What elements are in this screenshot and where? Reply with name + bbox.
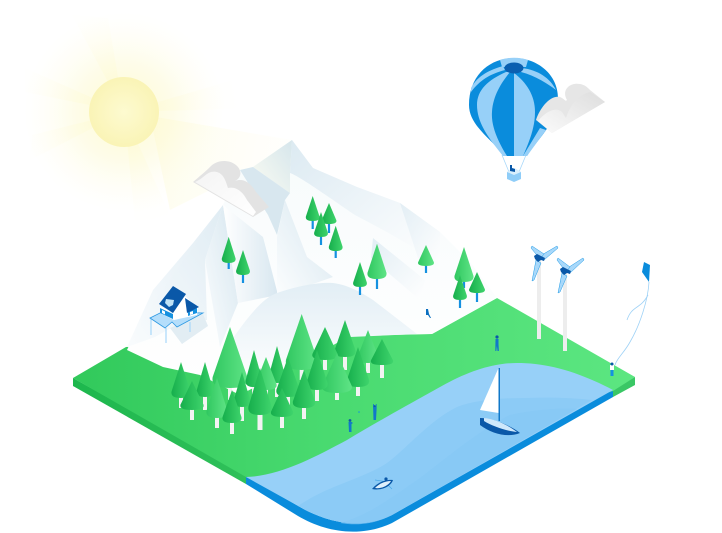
tree <box>233 372 251 421</box>
tree <box>453 275 467 308</box>
tree <box>334 320 356 370</box>
tree <box>222 390 242 434</box>
tree <box>276 357 300 407</box>
ropes <box>502 155 526 172</box>
tree <box>371 339 393 378</box>
people in meadow <box>348 335 614 432</box>
kite string <box>615 282 649 365</box>
left light gore <box>477 72 510 156</box>
deck legs <box>151 318 190 343</box>
mast <box>498 368 500 421</box>
wind turbines <box>531 246 584 351</box>
hull <box>480 418 520 435</box>
top crescent left <box>471 66 505 92</box>
person <box>373 404 377 420</box>
tree <box>314 212 328 245</box>
tree <box>306 350 328 401</box>
crown <box>504 62 524 74</box>
top crescent right <box>521 68 556 90</box>
main roof <box>159 286 186 313</box>
tree <box>312 327 338 370</box>
tree <box>268 346 286 397</box>
walls <box>160 296 198 320</box>
river <box>246 363 613 523</box>
sun disc <box>89 77 159 147</box>
tree <box>180 381 204 420</box>
tree <box>418 245 434 273</box>
basket rim <box>507 168 521 175</box>
sailboat <box>480 368 520 435</box>
island base <box>73 298 635 532</box>
right cloud <box>536 84 605 133</box>
tree <box>245 350 263 397</box>
tree <box>357 330 379 373</box>
boat hull <box>372 480 393 490</box>
turbine <box>557 258 584 351</box>
tree <box>329 226 343 258</box>
side roof <box>185 298 199 313</box>
tree <box>367 244 387 289</box>
lower right light strip <box>523 128 546 156</box>
water side <box>246 389 613 532</box>
rower <box>384 477 388 481</box>
mountain body <box>127 140 497 395</box>
house shadow <box>170 314 208 344</box>
right green side <box>613 377 635 397</box>
tree <box>322 353 352 400</box>
sun rays <box>25 15 292 220</box>
window blocks <box>160 308 197 319</box>
person <box>348 419 353 432</box>
mountain facets <box>127 140 440 347</box>
front hill <box>225 283 417 385</box>
house <box>150 286 208 344</box>
sun glow <box>24 12 224 212</box>
tree <box>469 272 485 302</box>
tree <box>347 347 369 396</box>
passenger <box>510 165 515 172</box>
basket <box>507 168 521 182</box>
windows <box>162 310 193 315</box>
mountain <box>127 140 497 395</box>
tree <box>286 314 318 380</box>
deck <box>150 312 203 328</box>
tree <box>171 362 191 408</box>
tree <box>322 203 336 233</box>
ball <box>358 411 360 413</box>
kite <box>615 262 650 365</box>
boat interior <box>375 481 391 488</box>
tree <box>196 362 214 410</box>
turbine <box>531 246 558 339</box>
kite tail <box>627 295 648 320</box>
kite flyer <box>610 362 614 376</box>
mountain trees <box>222 196 485 308</box>
hot air balloon <box>469 58 558 182</box>
tree <box>236 250 250 283</box>
river bands <box>298 398 592 524</box>
green top surface <box>73 298 635 480</box>
tree <box>212 327 248 400</box>
sun <box>24 12 292 220</box>
dormer <box>165 299 174 307</box>
forest <box>171 314 393 434</box>
envelope <box>469 58 558 156</box>
sail <box>480 368 498 413</box>
hiker on mountain <box>426 309 431 318</box>
kite body <box>642 262 650 282</box>
tree <box>271 388 293 428</box>
tree <box>293 370 315 419</box>
tree <box>454 247 474 288</box>
oars <box>375 480 392 489</box>
left green side <box>73 378 248 484</box>
top cap light <box>500 58 528 67</box>
deck <box>484 418 517 432</box>
tree <box>222 237 236 269</box>
tree <box>248 368 272 430</box>
tree <box>353 262 367 295</box>
rowboat <box>372 477 393 490</box>
tree <box>255 357 277 400</box>
person <box>495 335 499 351</box>
tree <box>306 196 320 229</box>
tree <box>206 378 228 428</box>
centre light gore <box>514 73 535 156</box>
left cloud <box>193 161 269 217</box>
